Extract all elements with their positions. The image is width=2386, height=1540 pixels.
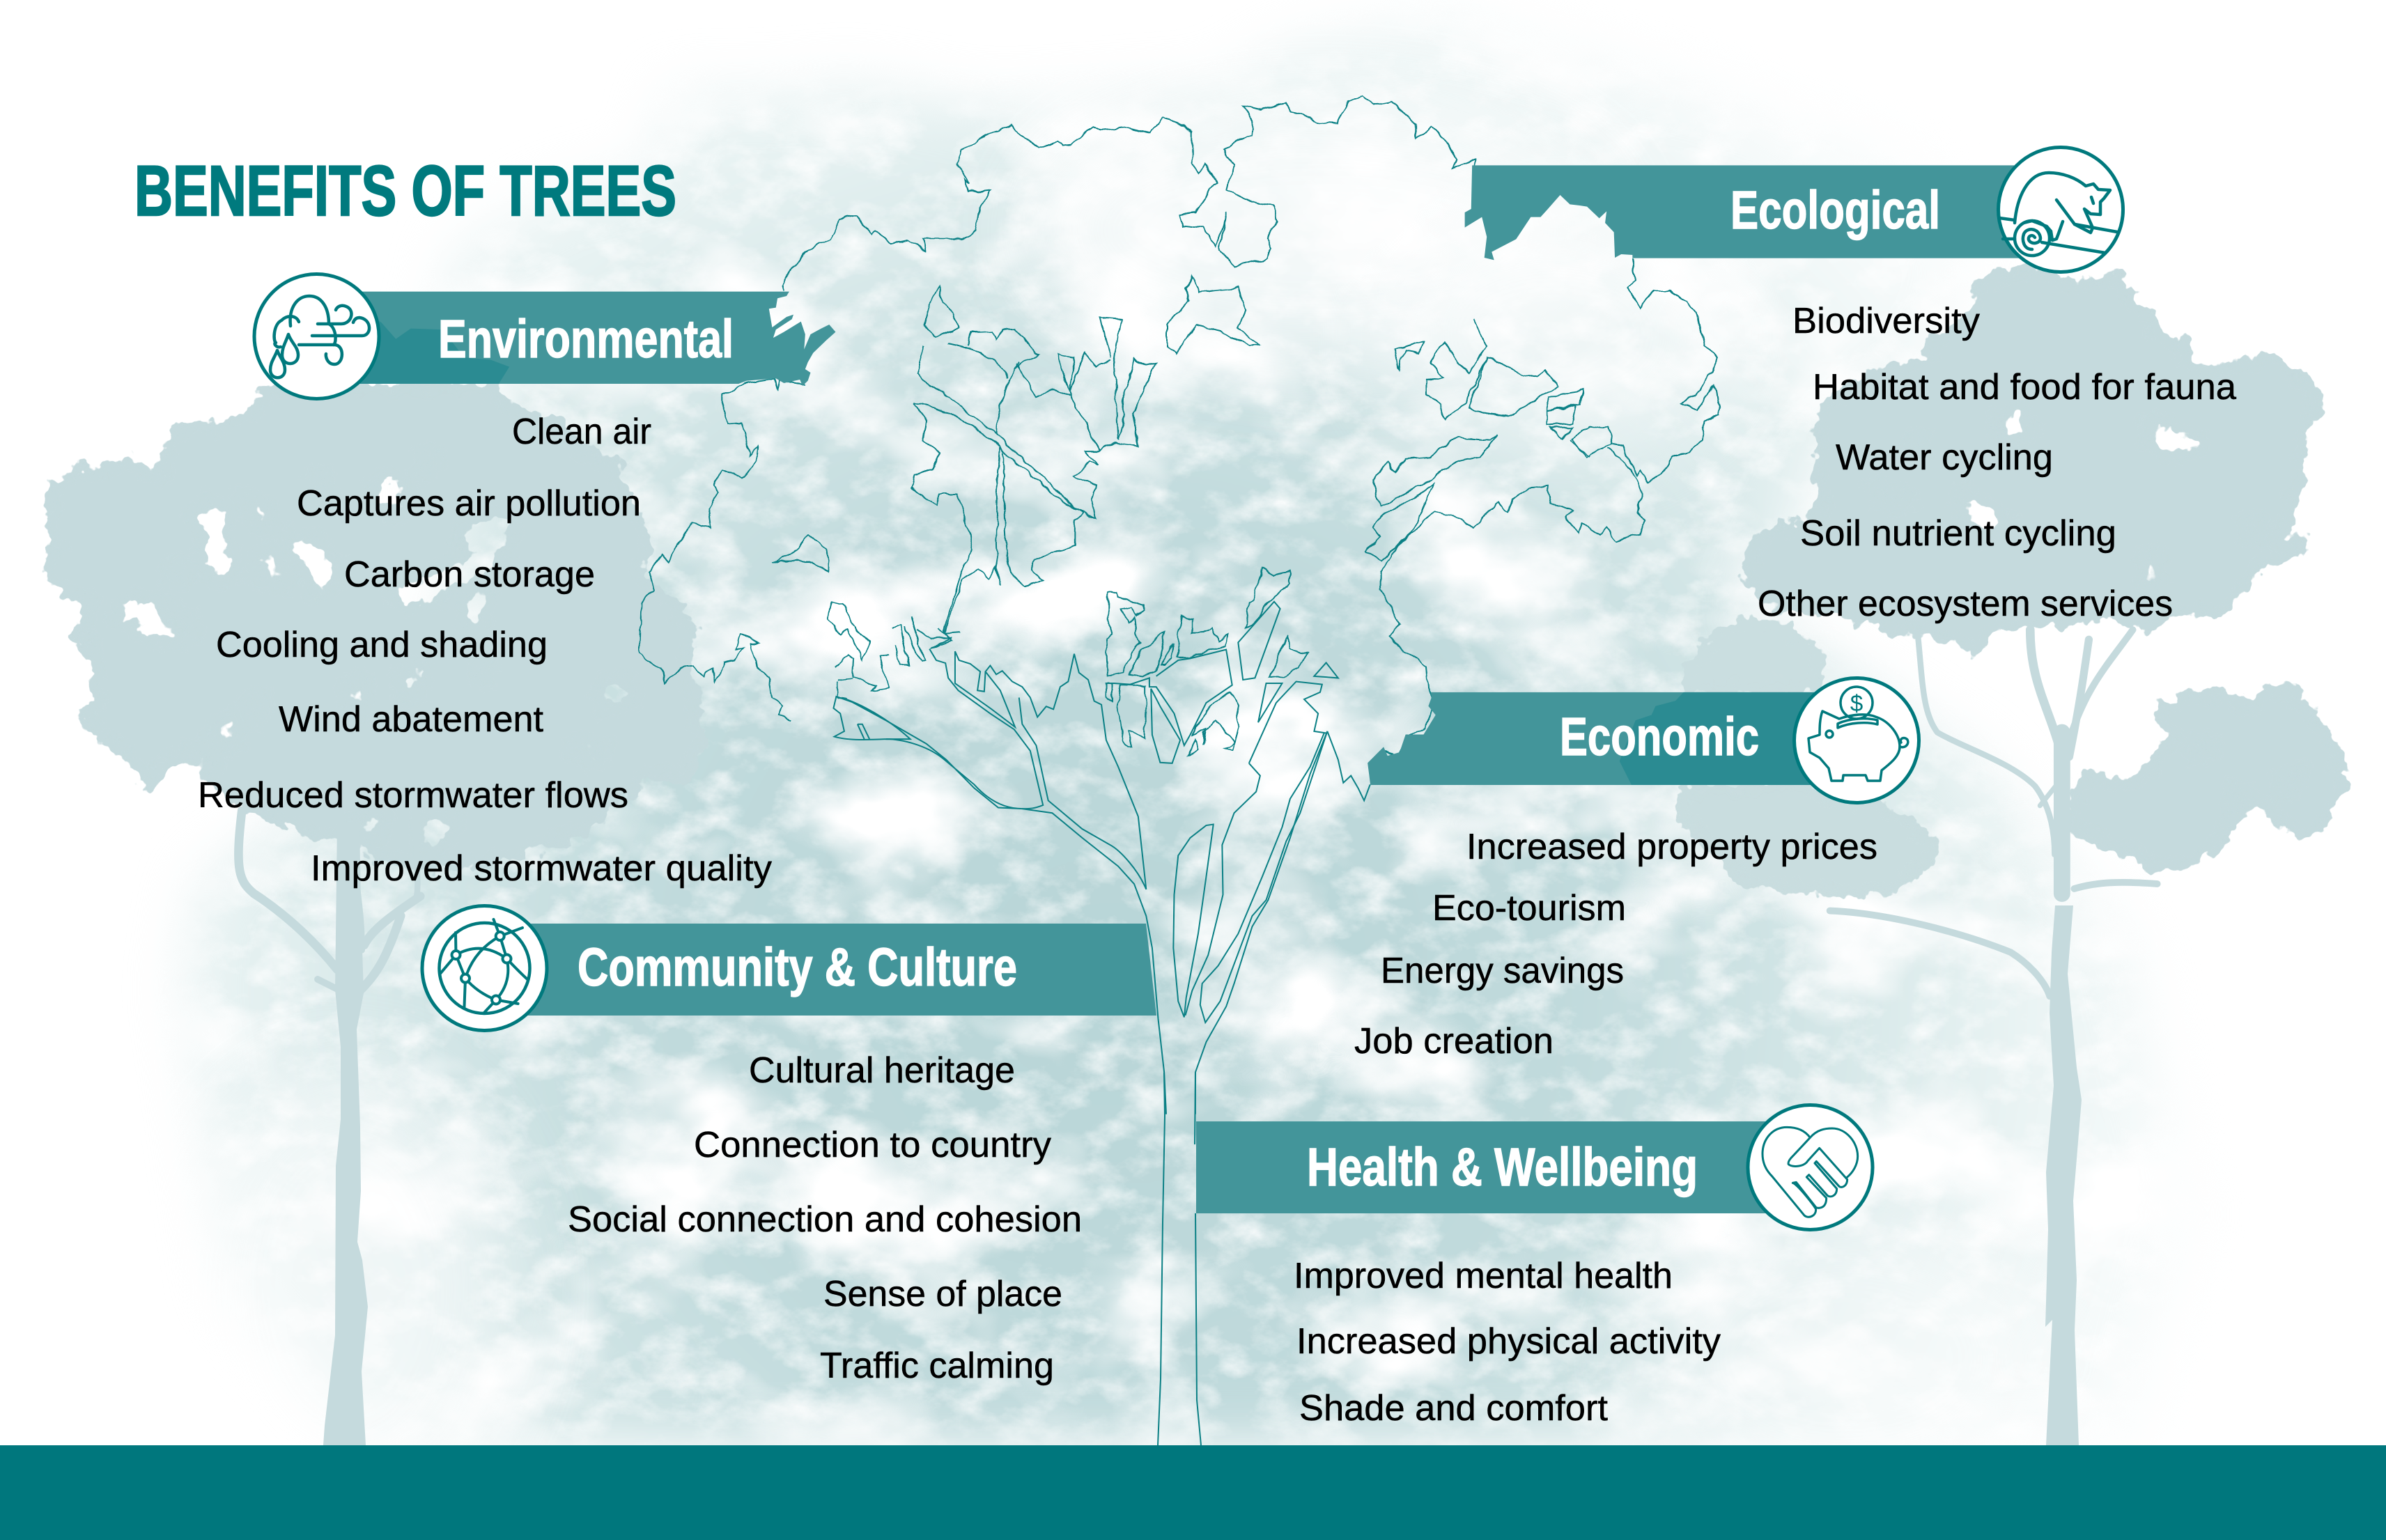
- list: community and culture benefits: Cultural heritage: [749, 1050, 1015, 1091]
- icon: possum on a branch: [1998, 148, 2123, 272]
- central tree outline: trunk and branches: [833, 602, 1370, 1445]
- heading: Economic: Economic: [1560, 707, 1759, 767]
- list: environmental benefits: Captures air pollution: [297, 483, 641, 524]
- icon: globe network: [422, 905, 547, 1031]
- heading: Environmental: Environmental: [438, 309, 734, 369]
- list: ecological benefits: [1758, 301, 2236, 624]
- ribbon: Health and Wellbeing: [1196, 1121, 1781, 1213]
- list: environmental benefits: [198, 412, 772, 889]
- central tree outline: crown: [640, 96, 1719, 763]
- list: health and wellbeing benefits: Improved mental health: [1294, 1256, 1673, 1296]
- list: ecological benefits: Habitat and food for fauna: [1813, 367, 2236, 407]
- list: ecological benefits: Soil nutrient cycling: [1800, 513, 2116, 554]
- list: environmental benefits: Improved stormwater quality: [311, 848, 772, 889]
- left background tree silhouette: [39, 383, 704, 1445]
- heading: Community and Culture: Community & Culture: [578, 938, 1017, 997]
- list: ecological benefits: Other ecosystem services: [1758, 584, 2173, 624]
- list: environmental benefits: Cooling and shading: [216, 625, 548, 665]
- list: community and culture benefits: Connection to country: [694, 1125, 1051, 1165]
- footer bar: [0, 1445, 2386, 1540]
- list: economic benefits: Eco-tourism: [1432, 888, 1626, 928]
- list: health and wellbeing benefits: [1294, 1256, 1721, 1429]
- list: economic benefits: [1354, 827, 1877, 1061]
- ribbon: Ecological: [1465, 165, 2039, 260]
- list: community and culture benefits: [568, 1050, 1082, 1386]
- list: community and culture benefits: Social connection and cohesion: [568, 1199, 1082, 1240]
- list: community and culture benefits: Sense of place: [823, 1274, 1062, 1314]
- coin dollar sign: $: [1850, 690, 1863, 716]
- list: economic benefits: Increased property prices: [1466, 827, 1877, 867]
- list: environmental benefits: Clean air: [512, 412, 651, 452]
- list: health and wellbeing benefits: Shade and comfort: [1299, 1388, 1609, 1429]
- list: environmental benefits: Wind abatement: [279, 699, 544, 740]
- icon: piggy bank with coin: [1795, 678, 1919, 802]
- list: community and culture benefits: Traffic calming: [820, 1346, 1054, 1386]
- icon: cloud, wind and rain: [254, 274, 379, 398]
- list: environmental benefits: Reduced stormwater flows: [198, 775, 628, 816]
- list: economic benefits: Energy savings: [1381, 951, 1624, 991]
- right background tree silhouette: [1673, 268, 2353, 1445]
- ribbon: Environmental: [309, 292, 835, 386]
- ribbon: Community and Culture: [481, 924, 1156, 1016]
- list: environmental benefits: Carbon storage: [344, 554, 595, 595]
- list: ecological benefits: Biodiversity: [1792, 301, 1980, 341]
- icon: handshake heart: [1748, 1105, 1873, 1230]
- list: ecological benefits: Water cycling: [1836, 437, 2053, 478]
- list: health and wellbeing benefits: Increased physical activity: [1296, 1321, 1721, 1362]
- heading: Ecological: Ecological: [1730, 180, 1940, 240]
- list: economic benefits: Job creation: [1354, 1021, 1554, 1061]
- ribbon: Economic: [1368, 692, 1820, 785]
- title: BENEFITS OF TREES: [134, 151, 676, 231]
- heading: Health and Wellbeing: Health & Wellbeing: [1307, 1137, 1698, 1197]
